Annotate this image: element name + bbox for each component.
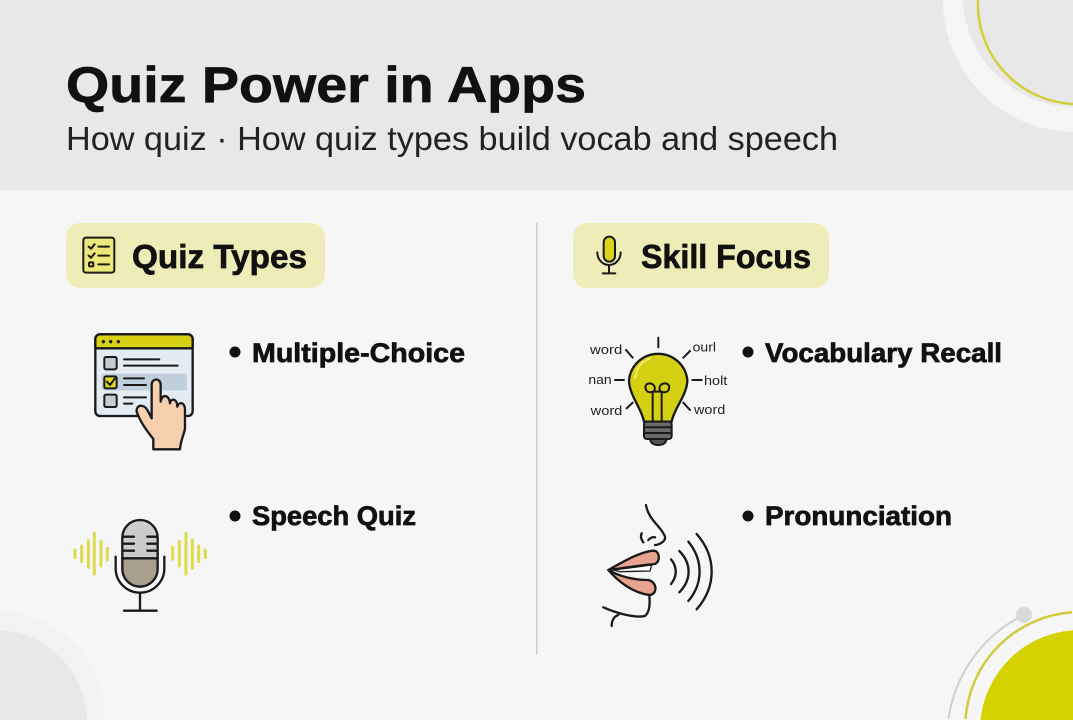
panel: quiz types heading <box>66 223 325 288</box>
bullet: speech quiz: Speech Quiz <box>252 501 416 531</box>
header band <box>0 0 1073 190</box>
icon: multiple-choice window with hand <box>95 334 193 449</box>
bullet: vocabulary recall: Vocabulary Recall <box>765 338 1002 368</box>
panel: skill focus heading <box>573 223 829 288</box>
bullet: multiple-choice: Multiple-Choice <box>252 338 465 368</box>
icon: light bulb with words <box>588 338 728 445</box>
icon: speaking mouth <box>603 505 712 626</box>
decoration: bottom-left circles <box>0 610 105 720</box>
title: Quiz Power in Apps <box>66 57 586 113</box>
icon: light bulb with words: word <box>589 342 622 357</box>
heading text: Quiz Types <box>132 238 307 275</box>
icon: light bulb with words: ourl <box>693 340 716 355</box>
column divider <box>536 223 538 655</box>
icon: light bulb with words: holt <box>704 373 728 388</box>
heading text: Skill Focus <box>641 238 811 275</box>
icon: light bulb with words: nan <box>588 372 612 387</box>
bullet: pronunciation: Pronunciation <box>765 501 952 531</box>
icon: small microphone <box>597 237 621 273</box>
subtitle: How quiz · How quiz types build vocab and speech <box>66 120 838 157</box>
icon: checklist <box>83 238 114 273</box>
icon: light bulb with words: word <box>590 403 622 418</box>
icon: light bulb with words: word <box>693 402 725 417</box>
icon: microphone with sound waves <box>75 520 205 611</box>
decoration: bottom-right yellow circle <box>948 607 1073 720</box>
